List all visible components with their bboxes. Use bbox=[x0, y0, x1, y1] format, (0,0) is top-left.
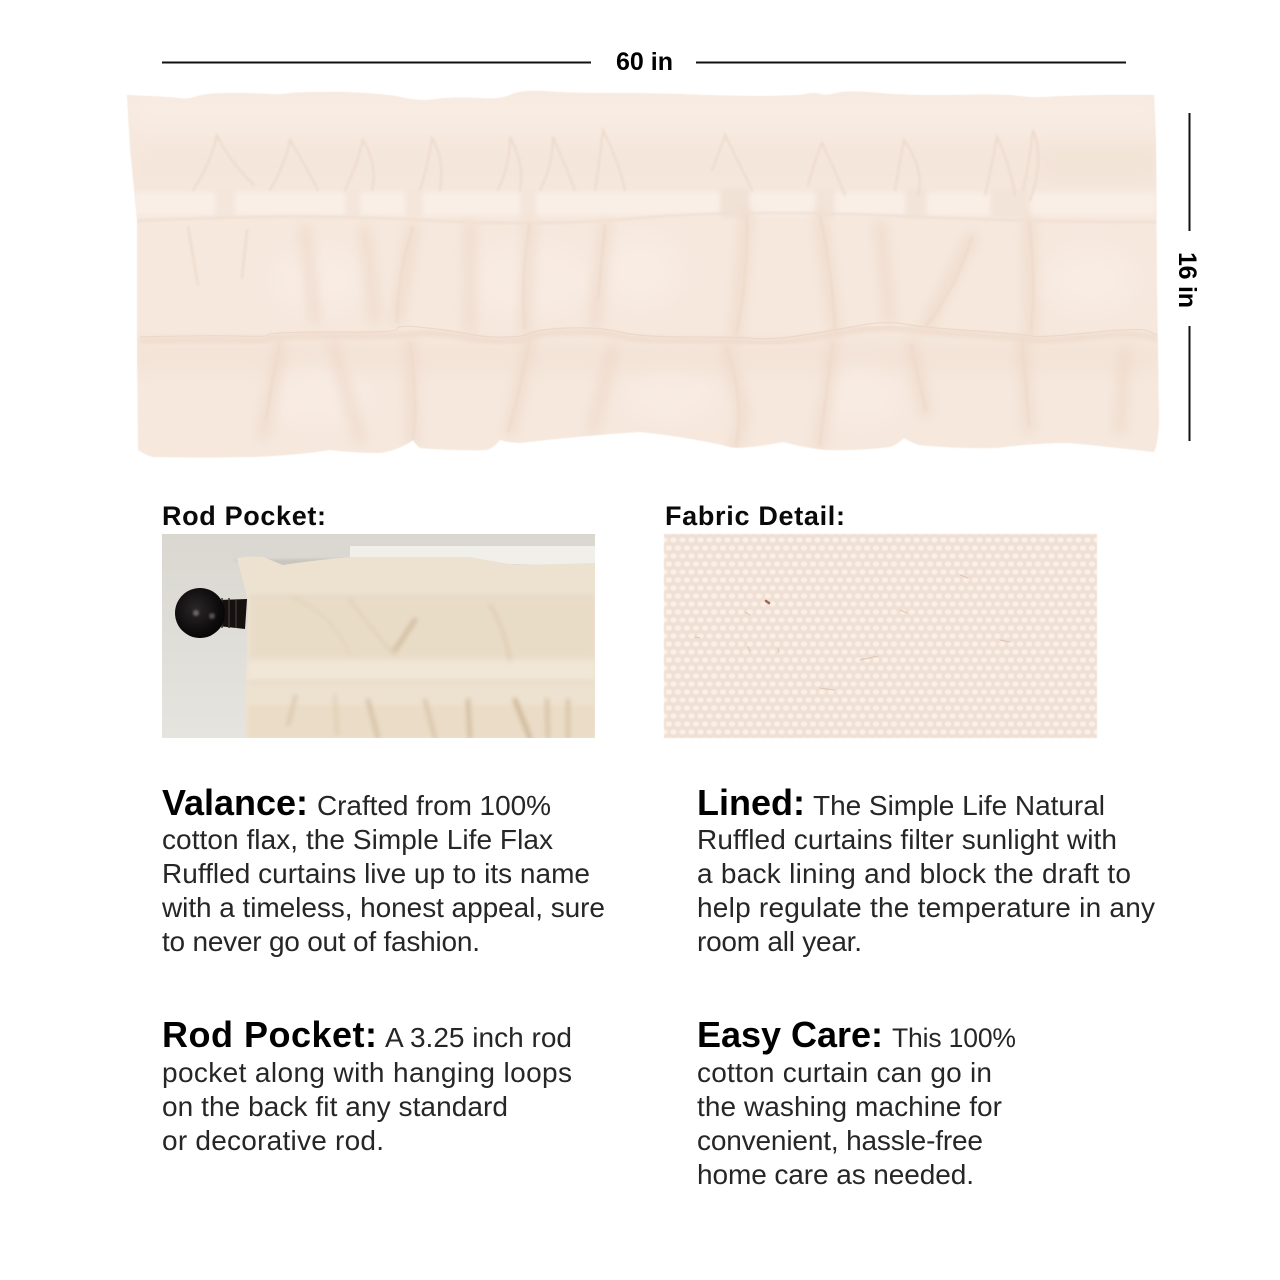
text block: Valance: to never go out of fashion. bbox=[162, 926, 480, 957]
ruffle seam bbox=[135, 213, 1157, 223]
text block: Lined bbox=[697, 782, 1155, 957]
window trim bbox=[350, 546, 595, 566]
text block: Lined: room all year. bbox=[697, 926, 862, 957]
text block: Valance: Valance: bbox=[162, 782, 308, 823]
curtain fabric bbox=[237, 557, 595, 738]
text block: Valance bbox=[161, 782, 605, 957]
text block: Valance: with a timeless, honest appeal, sure bbox=[161, 892, 605, 923]
text block: Easy Care: the washing machine for bbox=[697, 1091, 1002, 1122]
text block: Easy Care: home care as needed. bbox=[697, 1159, 974, 1190]
text block: Lined: Lined: bbox=[697, 782, 805, 823]
text block: Lined: help regulate the temperature in any bbox=[697, 892, 1155, 923]
text block: Rod Pocket: Rod Pocket: bbox=[162, 1014, 377, 1055]
creases bbox=[187, 227, 248, 285]
text block: Easy Care bbox=[697, 1014, 1016, 1190]
curtain shading bbox=[248, 597, 595, 738]
text block: Easy Care: convenient, hassle-free bbox=[697, 1125, 983, 1156]
text block: Rod Pocket: or decorative rod. bbox=[162, 1125, 384, 1156]
shadow below upper hem bbox=[140, 328, 1157, 343]
text block: Easy Care: Easy Care: bbox=[697, 1014, 883, 1055]
text block: Lined: Ruffled curtains filter sunlight with bbox=[697, 824, 1117, 855]
text block: Rod Pocket: pocket along with hanging loops bbox=[162, 1057, 572, 1088]
text block: Lined: The Simple Life Natural bbox=[813, 790, 1105, 821]
photo: ruffled flax valance bbox=[127, 90, 1160, 458]
photo: fabric weave detail bbox=[664, 534, 1097, 738]
broad fold shadows bbox=[263, 213, 1125, 447]
text block: Valance: cotton flax, the Simple Life Flax bbox=[162, 824, 553, 855]
weave flecks bbox=[695, 575, 1010, 690]
label: Rod Pocket: Rod Pocket: bbox=[162, 501, 326, 531]
text block: Rod Pocket bbox=[162, 1014, 572, 1156]
upper hem edge bbox=[140, 323, 1157, 339]
text block: Easy Care: cotton curtain can go in bbox=[697, 1057, 992, 1088]
text block: Lined: a back lining and block the draft to bbox=[697, 858, 1131, 889]
light band above ruffle seam bbox=[137, 194, 1154, 214]
text block: Valance: Ruffled curtains live up to its name bbox=[162, 858, 590, 889]
photo: rod pocket on curtain rod bbox=[162, 534, 595, 738]
text block: Easy Care: This 100% bbox=[892, 1023, 1016, 1053]
wall shadow bbox=[236, 558, 335, 565]
label: Fabric Detail: Fabric Detail: bbox=[665, 501, 845, 531]
height dimension: 16 in: 16 in bbox=[1173, 252, 1201, 308]
soft tonal areas bbox=[137, 154, 1158, 360]
width dimension: 60 in: 60 in bbox=[616, 48, 673, 76]
rod pocket pinches bbox=[193, 130, 1038, 200]
text block: Valance: Crafted from 100% bbox=[317, 790, 551, 821]
rod finial bbox=[175, 588, 247, 638]
text block: Rod Pocket: A 3.25 inch rod bbox=[385, 1022, 572, 1053]
text block: Rod Pocket: on the back fit any standard bbox=[162, 1091, 508, 1122]
